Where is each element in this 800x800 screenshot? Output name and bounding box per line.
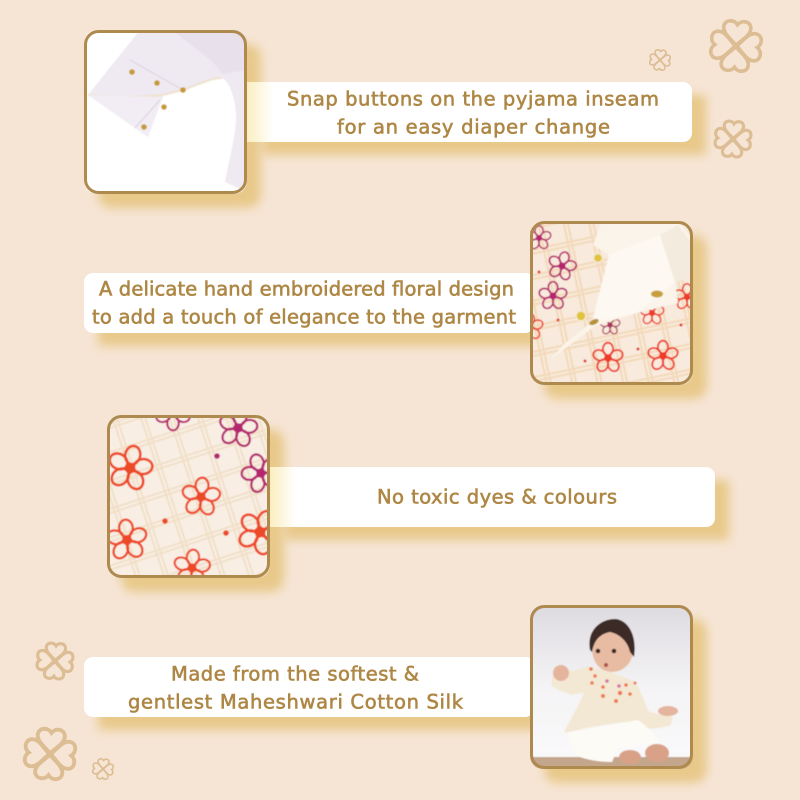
text bar	[84, 273, 534, 333]
photo: embroidered placket	[530, 221, 693, 385]
panel: cotton silk	[84, 605, 707, 783]
photo: baby wearing kurta	[530, 605, 693, 769]
panel: no toxic dyes	[102, 396, 729, 592]
photo frame	[532, 606, 692, 768]
text bar: Made from the softest &	[171, 662, 419, 686]
text bar: No toxic dyes & colours	[377, 486, 617, 508]
baby figure	[552, 619, 678, 764]
panel: embroidered design	[84, 221, 707, 399]
text bar: A delicate hand embroidered floral design	[99, 278, 514, 300]
text bar: gentlest Maheshwari Cotton Silk	[128, 690, 464, 714]
text bar	[84, 657, 534, 717]
text bar	[270, 467, 715, 527]
text bar: Snap buttons on the pyjama inseam	[287, 88, 659, 110]
text bar: for an easy diaper change	[337, 116, 610, 138]
text bar: to add a touch of elegance to the garment	[92, 306, 516, 328]
photo: embroidered fabric	[108, 416, 270, 578]
photo frame	[108, 416, 268, 576]
text bar	[247, 82, 692, 142]
panel: snap buttons	[84, 30, 706, 208]
photo frame	[86, 32, 246, 192]
photo frame	[532, 222, 692, 384]
photo: pyjama inseam	[84, 30, 247, 194]
